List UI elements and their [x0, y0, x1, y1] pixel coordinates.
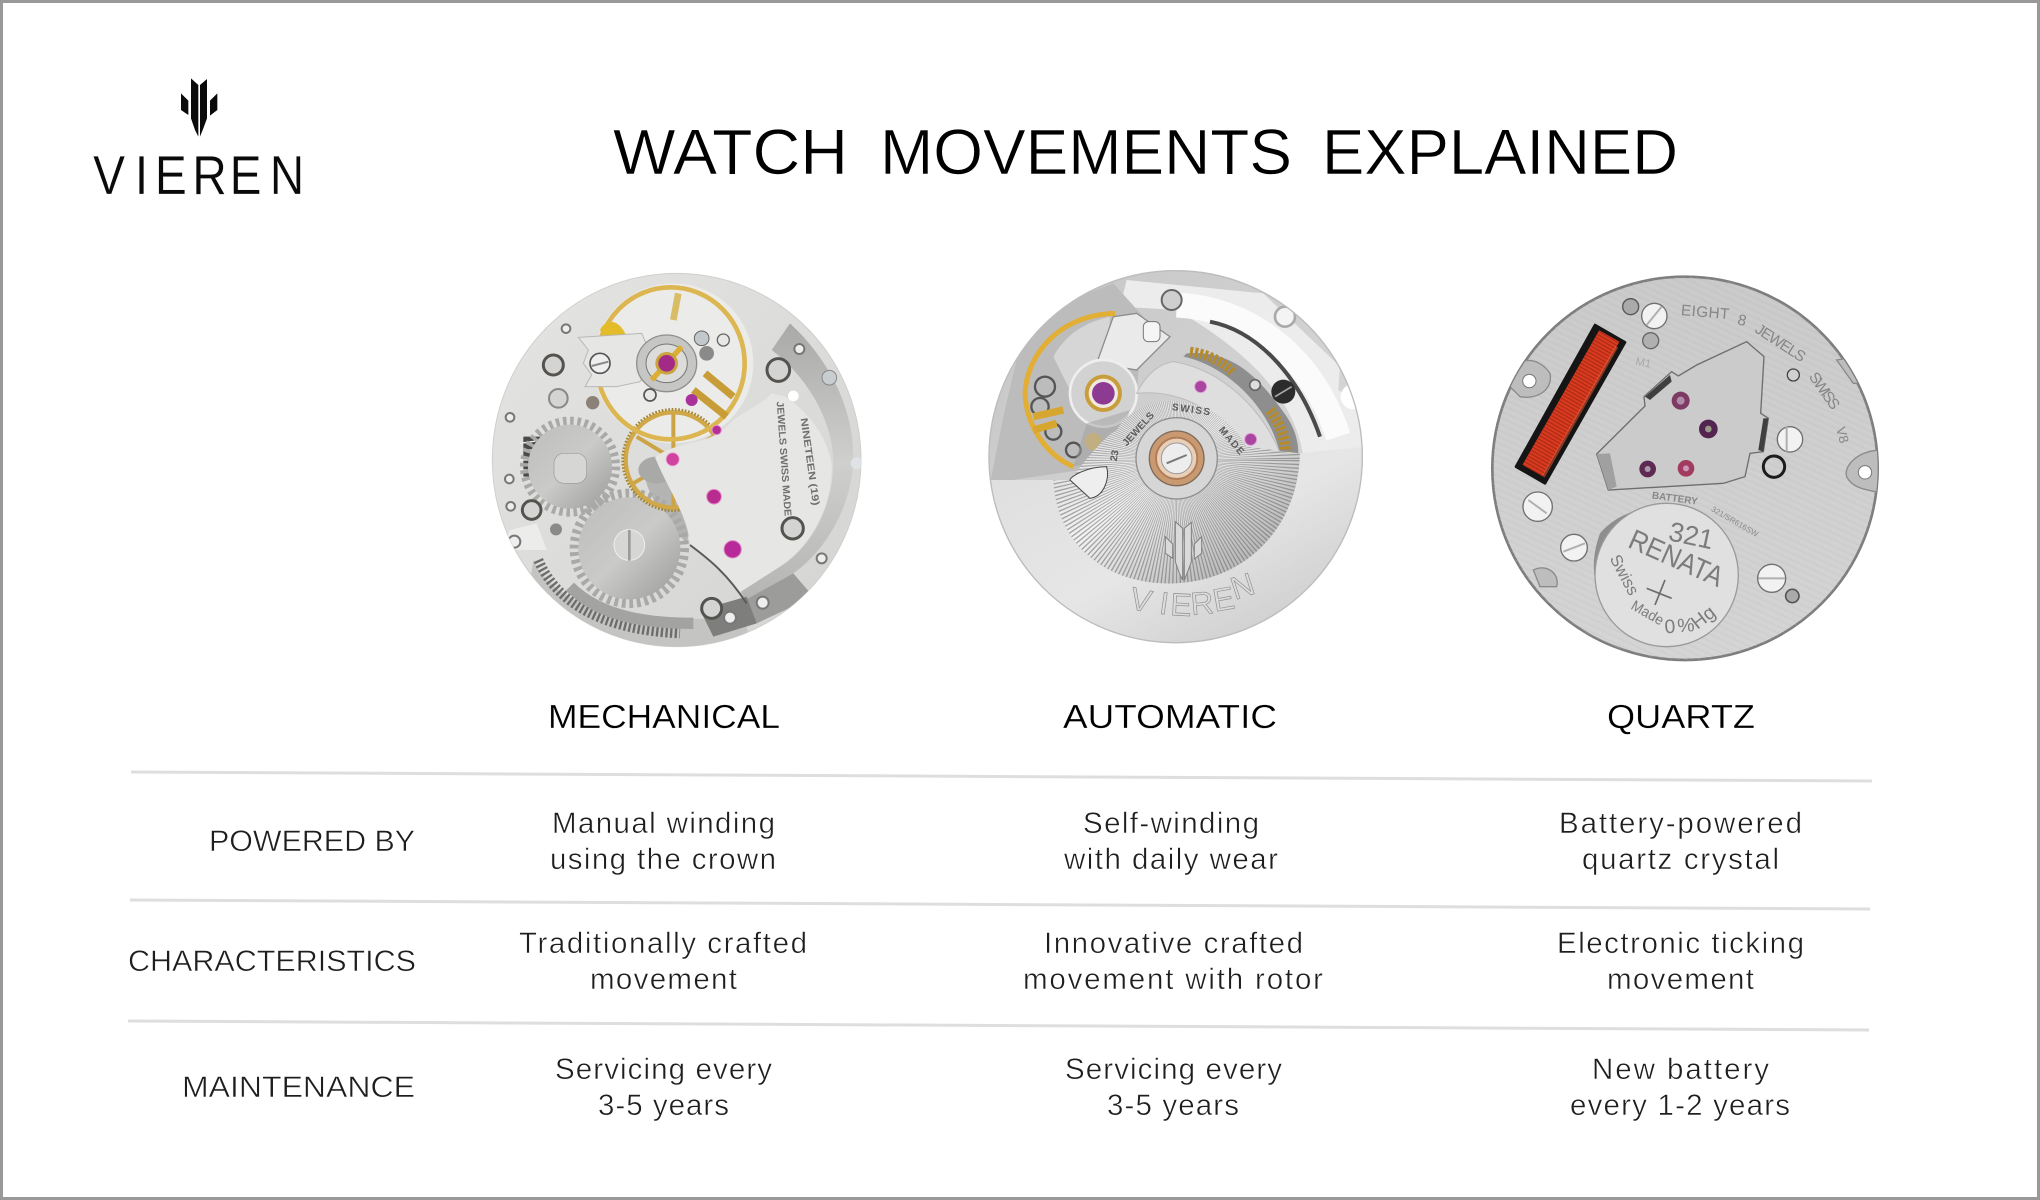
- heading: quartz: QUARTZ: [1607, 698, 1755, 735]
- heading: mechanical: MECHANICAL: [548, 698, 780, 735]
- cell: quartz powered by: [1559, 807, 1802, 876]
- main plate with jewels: [655, 393, 832, 603]
- cell: quartz maintenance: every 1-2 years: [1570, 1089, 1790, 1122]
- cell: automatic characteristics: movement with rotor: [1023, 963, 1323, 996]
- recessed plate: [1597, 342, 1768, 490]
- illustration: automatic movement: [983, 270, 1367, 650]
- engraved logo: [1165, 522, 1202, 580]
- battery: Hg: [1687, 602, 1720, 634]
- row label: characteristics: CHARACTERISTICS: [128, 945, 416, 978]
- illustration: quartz movement: [1490, 277, 1883, 663]
- cell: mechanical powered by: Manual winding: [552, 807, 775, 840]
- row label: powered by: POWERED BY: [209, 825, 415, 858]
- cell: automatic powered by: [1063, 807, 1278, 876]
- row label: maintenance: MAINTENANCE: [182, 1071, 415, 1104]
- engraved movement text: [1634, 302, 1852, 539]
- cell: mechanical characteristics: Traditionally crafted: [519, 927, 807, 960]
- row labels: [128, 825, 416, 1104]
- engraved jewels text: SWISS: [1171, 402, 1211, 418]
- engraved text: NINETEEN (19): [798, 417, 821, 506]
- engraved jewels text: [1109, 402, 1246, 462]
- right steel bridge: [700, 323, 853, 637]
- mounting notches: [1507, 357, 1883, 587]
- battery: RENATA: [1624, 524, 1729, 594]
- top plate: [1120, 280, 1366, 460]
- cell: mechanical maintenance: 3-5 years: [598, 1089, 729, 1122]
- screws: [1523, 303, 1803, 592]
- engraved jewels text: 23: [1109, 449, 1122, 462]
- battery: Swiss: [1606, 551, 1643, 598]
- engraved movement text: 321/SR616SW: [1710, 505, 1760, 539]
- cell: automatic powered by: Self-winding: [1083, 807, 1259, 840]
- title: WATCH: [613, 116, 848, 188]
- cell: quartz maintenance: New battery: [1592, 1053, 1769, 1086]
- gold gear teeth: [1190, 352, 1285, 457]
- gear: upper wheel: [524, 421, 616, 512]
- cell: quartz powered by: Battery-powered: [1559, 807, 1802, 840]
- engraved movement text: EIGHT: [1680, 302, 1731, 323]
- battery: Made: [1628, 598, 1666, 629]
- title: EXPLAINED: [1322, 116, 1678, 188]
- cell: quartz characteristics: Electronic ticking: [1557, 927, 1804, 960]
- screws and holes: [522, 355, 803, 618]
- cell: mechanical maintenance: Servicing every: [555, 1053, 772, 1086]
- rotor crescent: VIEREN: [1127, 565, 1259, 623]
- rotor guilloche disc: [1054, 400, 1300, 584]
- column headings: [548, 698, 1755, 735]
- gear: gold third wheel: [623, 409, 724, 511]
- logo: Vieren: [93, 78, 304, 206]
- engraved movement text: V8: [1833, 425, 1852, 445]
- automatic rim edge: [989, 271, 1362, 643]
- engraved movement text: 8: [1736, 311, 1748, 330]
- battery: 321: [1666, 516, 1717, 555]
- gear: lower wheel: [574, 493, 684, 603]
- battery: [1594, 503, 1738, 647]
- cell: quartz powered by: quartz crystal: [1582, 843, 1779, 876]
- balance wheel: [578, 287, 745, 439]
- engraved movement text: BATTERY: [1651, 490, 1699, 508]
- engraved movement text: M1: [1634, 356, 1652, 371]
- cell: mechanical maintenance: [555, 1053, 772, 1122]
- engraved movement text: JEWELS: [1752, 321, 1809, 366]
- cell: mechanical powered by: using the crown: [550, 843, 776, 876]
- cell: mechanical characteristics: [519, 927, 807, 996]
- logo wordmark: VIEREN: [93, 144, 304, 206]
- cell: automatic characteristics: [1023, 927, 1323, 996]
- cell: quartz characteristics: movement: [1607, 963, 1754, 996]
- coil: [1516, 325, 1625, 483]
- icon: Vieren emblem: [181, 78, 217, 137]
- title: [613, 116, 1678, 188]
- rotor bearing: [1136, 418, 1217, 499]
- cell: quartz maintenance: [1570, 1053, 1790, 1122]
- cell: automatic powered by: with daily wear: [1063, 843, 1278, 876]
- balance wheel: [990, 283, 1182, 483]
- engraved movement text: SWISS: [1805, 369, 1843, 413]
- rotor crescent: [991, 453, 1362, 633]
- table dividers: [128, 772, 1872, 1030]
- cell: mechanical characteristics: movement: [590, 963, 737, 996]
- title: MOVEMENTS: [880, 116, 1292, 188]
- lower bridge with jewels: [1136, 361, 1280, 451]
- cell: mechanical powered by: [550, 807, 776, 876]
- cell: automatic maintenance: 3-5 years: [1107, 1089, 1239, 1122]
- cell: quartz characteristics: [1557, 927, 1804, 996]
- cell: automatic maintenance: Servicing every: [1065, 1053, 1282, 1086]
- engraved text: JEWELS SWISS MADE: [774, 401, 793, 517]
- battery: 0%: [1664, 615, 1695, 638]
- cell: automatic maintenance: [1065, 1053, 1282, 1122]
- cell: automatic characteristics: Innovative crafted: [1044, 927, 1303, 960]
- heading: automatic: AUTOMATIC: [1063, 698, 1277, 735]
- engraved jewels text: JEWELS: [1121, 410, 1157, 449]
- illustration: mechanical movement: [492, 273, 863, 650]
- engraved jewels text: MADE: [1216, 425, 1246, 458]
